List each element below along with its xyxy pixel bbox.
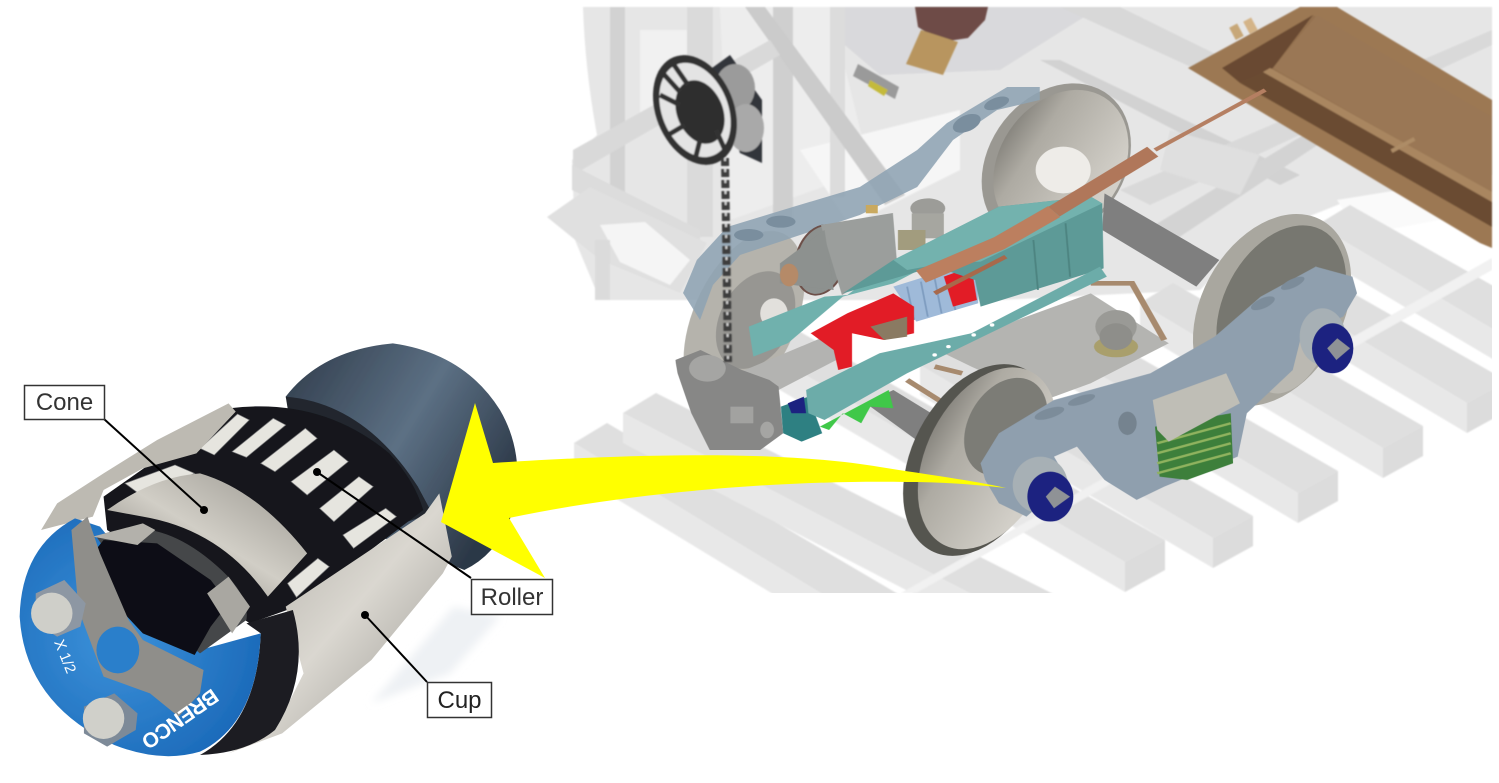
front journal adapter [1013,457,1068,513]
red piston [811,267,977,370]
sleeper 2 [623,393,1052,593]
label: Cone: Cone [36,389,93,416]
rear end cap [1312,323,1353,373]
cup outer shell [229,493,452,753]
air cylinder [780,198,945,297]
lower collar [96,528,247,653]
blue end disc [20,518,261,756]
sleeper 3 [780,332,1166,592]
yellow arrow [441,403,1006,578]
label: Cup: Cup [437,687,482,714]
sleeper 7 [1343,295,1492,433]
rear wheel [1166,201,1378,419]
far wheel left [660,222,828,418]
brake rigging [907,283,1164,403]
ghost platform [547,187,707,293]
label: Roller: Roller [481,584,543,611]
label: Roller [472,580,552,614]
disc text: BRENCO: BRENCO [137,684,222,753]
coupler casting [675,350,783,450]
ghost rail bands [1040,7,1492,250]
front end cap [1027,472,1073,522]
brake housing [712,55,764,163]
near rail [901,258,1492,593]
bearing assembly [20,343,517,756]
lower bolt [83,693,137,747]
rear housing cylinder [286,343,517,570]
sleeper 6 [1140,283,1423,478]
teal arm [749,260,925,357]
blue spring [893,265,978,322]
leader line: cup [361,611,427,682]
locking plate [71,517,204,717]
sleeper 1 [574,423,897,593]
sleeper 4 [920,345,1253,568]
rollers [125,414,396,597]
brown overhead fitting [906,7,988,75]
teal beam body [843,197,1104,307]
bore [93,540,229,655]
blue slot [96,627,139,673]
cone tab [207,577,250,633]
disc text: size: X 1/2 [50,637,79,676]
spring group [1155,413,1233,480]
rear axle [1102,193,1219,287]
bolster [944,293,1169,400]
truck assembly [660,71,1378,568]
front axle [866,390,953,443]
leader line: roller [313,468,471,578]
silver cone [107,473,307,597]
dark shoulder band [286,397,432,527]
ghost railcar body [547,7,1492,300]
black roller cage [104,406,423,623]
front wheel [877,352,1082,568]
upper tab [93,523,155,545]
brown hopper box [1188,7,1492,248]
copper brake rod [921,90,1265,293]
cup upper shell [41,403,236,530]
small block fitting [853,64,899,99]
hand brake wheel and chain [637,43,764,362]
label: Cup [428,682,492,718]
track: sleepers and rails [574,205,1492,593]
near side frame [981,267,1357,517]
upper bolt [31,580,86,637]
bearing shadow [371,607,500,703]
coupler arm [737,337,843,390]
teal lower rail [806,267,1107,420]
chain [725,158,728,362]
sleeper 5 [1074,358,1338,523]
far wheel right [958,71,1154,256]
sleeper 8 [1323,205,1492,359]
teal beam end [781,397,822,442]
label: Cone [24,386,104,420]
seal ring [200,610,299,755]
green brake shoes [820,390,893,430]
rear journal adapter [1300,308,1346,365]
far side frame [683,87,1040,320]
brake wheel [637,43,753,177]
leader line: cone [104,419,208,514]
spring box [1153,373,1240,442]
